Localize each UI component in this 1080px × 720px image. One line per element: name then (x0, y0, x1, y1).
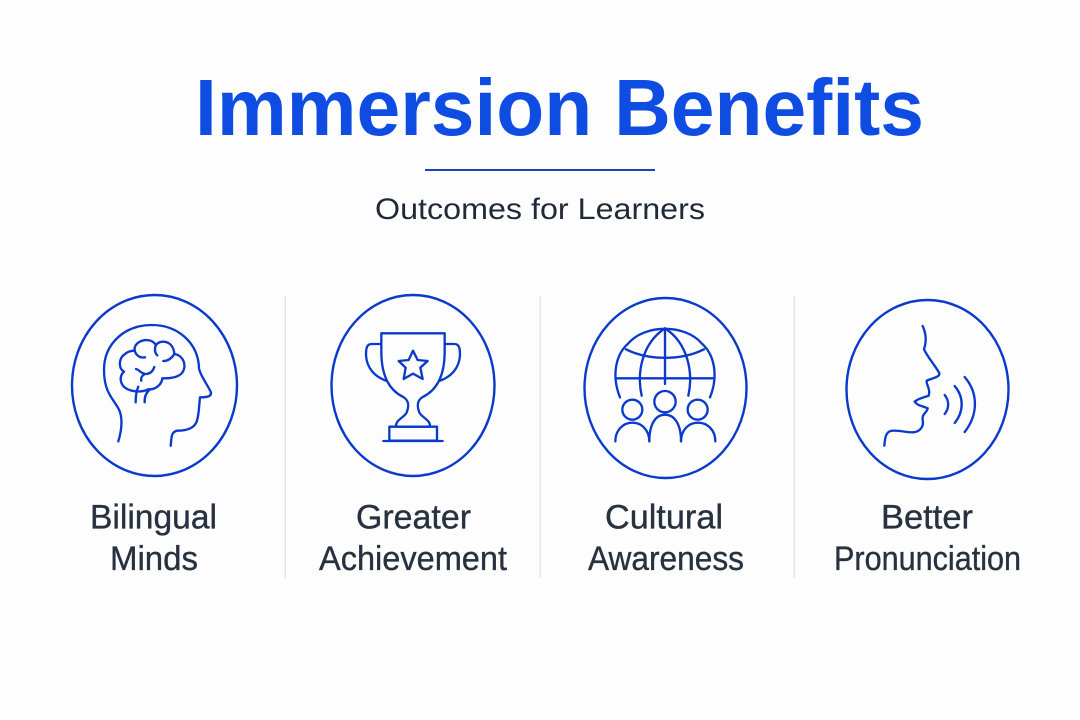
icon: speaking profile with sound waves (846, 300, 1008, 479)
title underline (425, 169, 655, 171)
panel: cultural awareness (584, 298, 746, 578)
label: bilingual minds: Minds (110, 540, 198, 578)
label: greater achievement: Achievement (319, 540, 508, 578)
label: better pronunciation: Better (881, 498, 973, 536)
icon: trophy with star (332, 295, 494, 476)
icon: head with brain (72, 295, 237, 476)
label: better pronunciation: Pronunciation (834, 540, 1021, 578)
label: cultural awareness (588, 498, 744, 578)
label: bilingual minds (90, 498, 217, 578)
subtitle: Outcomes for Learners (375, 193, 705, 226)
panel: greater achievement (319, 295, 508, 578)
label: cultural awareness: Cultural (605, 498, 723, 536)
label: bilingual minds: Bilingual (90, 498, 217, 536)
panel: bilingual minds (72, 295, 237, 578)
label: cultural awareness: Awareness (588, 540, 744, 578)
icon: globe with people (584, 298, 746, 478)
label: better pronunciation (834, 498, 1021, 578)
label: greater achievement (319, 498, 508, 578)
panel: better pronunciation (834, 300, 1021, 578)
title: Immersion Benefits (195, 63, 924, 152)
label: greater achievement: Greater (356, 498, 471, 536)
